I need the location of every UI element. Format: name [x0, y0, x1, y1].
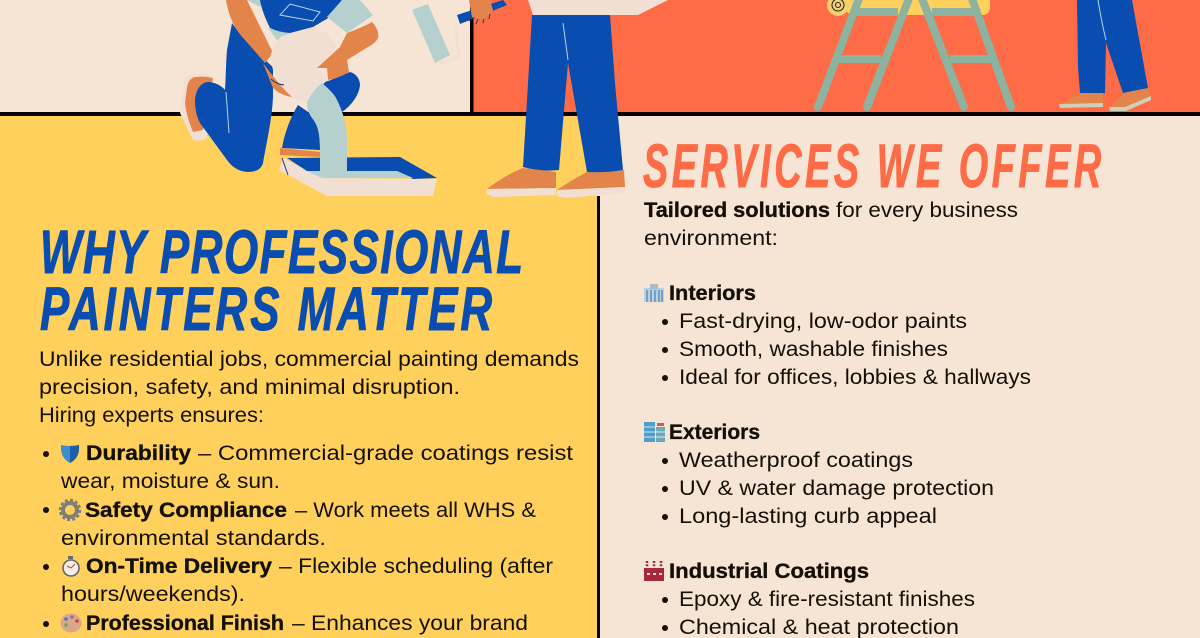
text block: intro to professional painters: Unlike residential jobs, commercial painting demands: [39, 347, 579, 371]
service: interiors: Interiors: [669, 281, 756, 305]
panel: why professional painters matter: [0, 116, 597, 638]
text block: intro to professional painters: [39, 347, 579, 427]
illustration: standing painter holding a board: [457, 0, 668, 198]
list item: safety compliance: – Work meets all WHS &: [295, 498, 536, 522]
service: interiors: Fast-drying, low-odor paints: [679, 309, 967, 333]
text block: services intro: [644, 198, 1018, 250]
icon: office building: [644, 284, 664, 302]
list item: professional finish: – Enhances your brand: [292, 611, 528, 635]
list item: professional finish: [43, 611, 528, 635]
panel: top left peach: [0, 0, 470, 112]
list item: durability: [43, 441, 573, 493]
text block: intro to professional painters: Hiring experts ensures:: [39, 403, 264, 427]
heading: why professional painters matter: WHY PROFESSIONAL: [40, 219, 523, 287]
list item: on-time delivery: – Flexible scheduling (after: [279, 554, 553, 578]
service: exteriors: Long-lasting curb appeal: [679, 504, 937, 528]
icon: city buildings: [644, 422, 665, 442]
service: exteriors: Weatherproof coatings: [679, 448, 913, 472]
list item: durability: wear, moisture & sun.: [60, 469, 280, 493]
text block: intro to professional painters: precision, safety, and minimal disruption.: [39, 375, 460, 399]
icon: gear: [60, 500, 80, 520]
panel: top right orange: [473, 0, 1200, 112]
panel: services we offer: [600, 116, 1200, 638]
list item: on-time delivery: [43, 554, 553, 606]
icon: stopwatch: [63, 556, 79, 576]
icon: palette: [60, 614, 82, 632]
list item: safety compliance: Safety Compliance: [85, 498, 287, 522]
illustration: paint roller: [412, 4, 459, 64]
list item: durability: Durability: [86, 441, 191, 465]
list item: safety compliance: environmental standards.: [61, 526, 326, 550]
service: exteriors: UV & water damage protection: [679, 476, 994, 500]
service: interiors: Smooth, washable finishes: [679, 337, 948, 361]
service: industrial coatings: [644, 559, 975, 638]
illustration: third painter legs: [1059, 0, 1151, 111]
service: industrial coatings: Industrial Coatings: [669, 559, 869, 583]
illustration: kneeling painter pouring paint: [180, 0, 437, 196]
list item: durability: – Commercial-grade coatings resist: [198, 441, 573, 465]
service: exteriors: [644, 420, 994, 528]
text block: services intro: for every business: [836, 198, 1018, 222]
icon: factory: [644, 561, 664, 581]
service: exteriors: Exteriors: [669, 420, 760, 444]
list item: safety compliance: [43, 498, 536, 550]
heading: services we offer: SERVICES WE OFFER: [643, 132, 1101, 200]
illustration: ladder with paint roll: [818, 0, 1011, 107]
service: interiors: [644, 281, 1031, 389]
text block: services intro: environment:: [644, 226, 778, 250]
list item: professional finish: Professional Finish: [86, 611, 284, 635]
service: industrial coatings: Epoxy & fire-resistant finishes: [679, 587, 975, 611]
heading: why professional painters matter: PAINTERS MATTER: [40, 276, 493, 344]
text block: services intro: Tailored solutions: [644, 198, 830, 222]
icon: shield: [61, 445, 79, 463]
list item: on-time delivery: On-Time Delivery: [86, 554, 272, 578]
service: interiors: Ideal for offices, lobbies & hallways: [679, 365, 1031, 389]
heading: why professional painters matter: [40, 219, 523, 344]
list item: on-time delivery: hours/weekends).: [61, 582, 245, 606]
